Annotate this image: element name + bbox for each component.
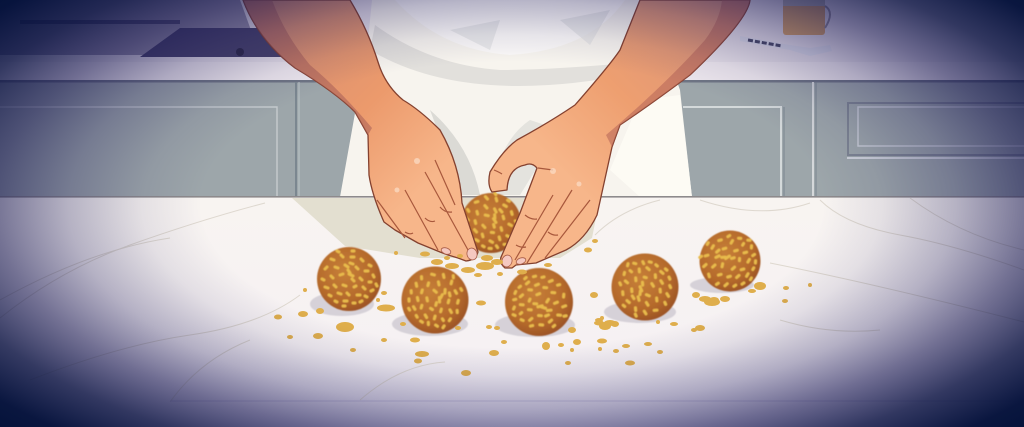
right arm and hand: [394, 0, 750, 268]
left finger lines: [377, 160, 468, 250]
mug: [783, 0, 830, 35]
right cabinet panel: [683, 107, 781, 197]
ball 3: [500, 264, 578, 341]
left cabinet panel: [0, 107, 277, 197]
drawer panel: [848, 103, 1024, 155]
front edge of counter: [170, 400, 1024, 402]
back countertop: [0, 0, 1024, 64]
ball 1: [317, 247, 381, 311]
counter front edge: [0, 62, 1024, 81]
stove on counter: [0, 0, 310, 57]
left arm and hand: [243, 0, 478, 261]
left arm shading: [243, 0, 372, 135]
right finger lines: [494, 168, 590, 263]
right arm shading: [606, 0, 750, 147]
central ball being shaped: [454, 185, 529, 260]
scattered crumbs: [274, 239, 812, 376]
knuckle highlights: [394, 158, 582, 192]
left fingernails: [440, 246, 478, 261]
hand shadow: [292, 198, 600, 258]
row of coated balls with shadows: [310, 223, 767, 341]
chef: shirt and apron: [340, 0, 692, 197]
spoon: [740, 36, 832, 56]
cabinets: [0, 80, 1024, 198]
ball 5: [692, 223, 767, 298]
marble veins: [0, 198, 1024, 402]
crumbs under the hands: [420, 252, 430, 256]
ball shadows: [310, 277, 754, 337]
background: kitchen: [0, 0, 1024, 198]
ball 2: [398, 263, 473, 338]
right fingernails: [501, 254, 527, 268]
ball 4: [606, 248, 683, 326]
marble counter: [0, 196, 1024, 427]
